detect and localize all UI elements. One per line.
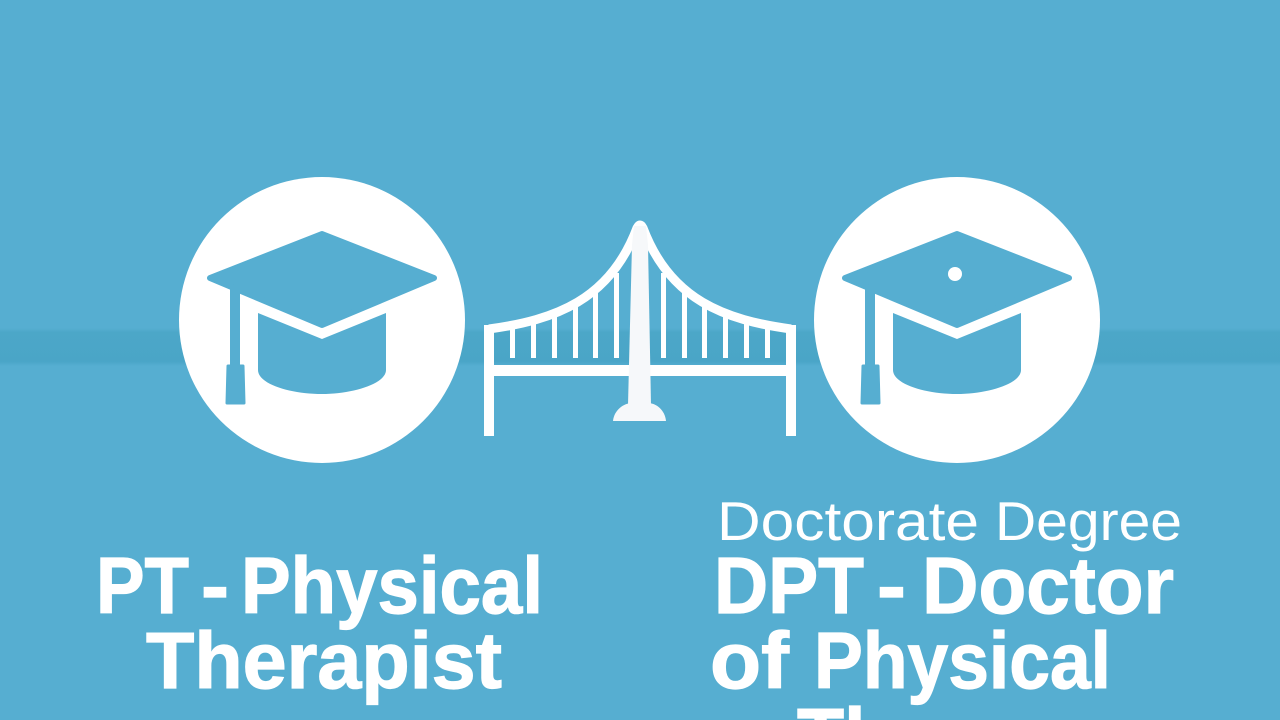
heading: PT - Physical Therapist: Therapist xyxy=(146,616,502,705)
heading: PT - Physical Therapist xyxy=(96,541,543,705)
label: Doctorate Degree: Degree xyxy=(995,490,1182,552)
heading: PT - Physical Therapist: PT xyxy=(96,541,189,630)
icon: graduation cap, DPT xyxy=(814,177,1100,463)
heading: PT - Physical Therapist: Physical xyxy=(241,541,543,630)
heading: DPT - Doctor of Physical Therapy: Doctor xyxy=(922,541,1174,630)
heading: DPT - Doctor of Physical Therapy: Physical xyxy=(814,616,1111,705)
label: Doctorate Degree: Doctorate xyxy=(717,490,979,552)
heading: DPT - Doctor of Physical Therapy: DPT xyxy=(714,541,864,630)
icon: suspension bridge xyxy=(484,225,796,436)
heading: DPT - Doctor of Physical Therapy xyxy=(710,541,1174,720)
heading: DPT - Doctor of Physical Therapy: of xyxy=(710,616,789,705)
heading: PT - Physical Therapist: - xyxy=(201,541,229,630)
label: Doctorate Degree xyxy=(717,490,1182,552)
icon: graduation cap, PT xyxy=(179,177,465,463)
heading: DPT - Doctor of Physical Therapy: - xyxy=(877,541,906,630)
